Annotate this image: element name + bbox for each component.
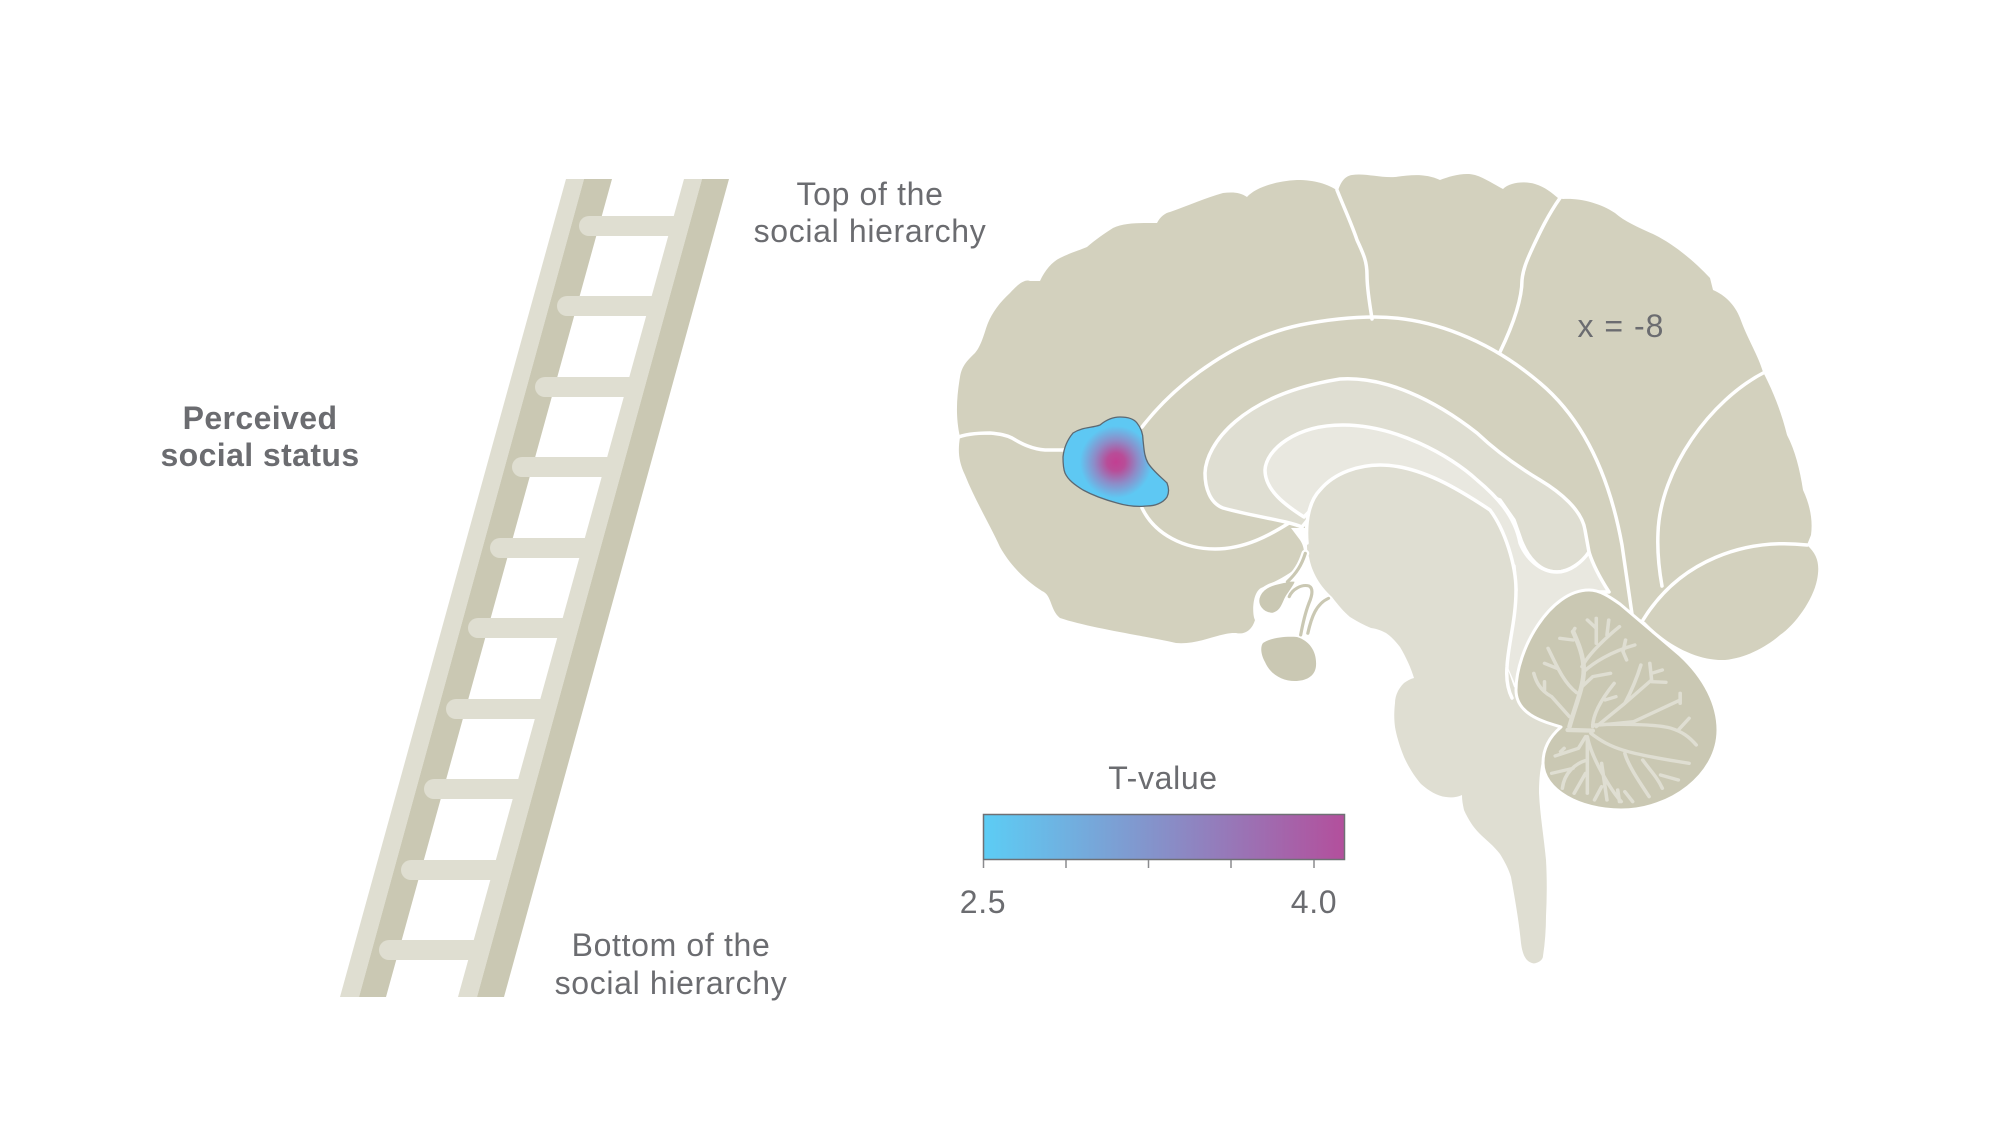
left rail xyxy=(340,179,612,997)
legend title: T-value xyxy=(1108,760,1218,796)
minimum label: 2.5 xyxy=(960,884,1006,920)
sulci: white lobe boundaries xyxy=(956,190,1807,620)
label: perceived social status: social status xyxy=(160,437,360,473)
hypothalamic stalk and small nucleus xyxy=(1258,553,1329,635)
label: bottom of the social hierarchy: Bottom of the xyxy=(572,927,770,963)
ventricle xyxy=(1265,425,1609,700)
rungs xyxy=(379,216,684,960)
ticks xyxy=(984,860,1314,868)
brainstem and thalamus xyxy=(1306,465,1562,963)
maximum label: 4.0 xyxy=(1291,884,1337,920)
gradient bar xyxy=(984,814,1344,860)
label: bottom of the social hierarchy: social hierarchy xyxy=(555,965,787,1001)
thalamus outline xyxy=(1307,465,1516,698)
pituitary xyxy=(1261,637,1316,681)
label: x coordinate: x = -8 xyxy=(1578,308,1664,344)
arbor vitae branches xyxy=(1534,618,1696,802)
cortex silhouette xyxy=(957,174,1818,660)
label: perceived social status: Perceived xyxy=(183,400,337,436)
activation blob xyxy=(1063,417,1168,506)
corpus callosum xyxy=(1205,379,1589,572)
label: top of the social hierarchy: social hierarchy xyxy=(754,213,986,249)
cerebellum xyxy=(1516,590,1718,810)
legend: T-value colour scale xyxy=(960,760,1344,920)
brain illustration xyxy=(956,174,1818,963)
ladder xyxy=(340,179,729,997)
label: top of the social hierarchy: Top of the xyxy=(796,176,944,212)
right rail xyxy=(458,179,729,997)
